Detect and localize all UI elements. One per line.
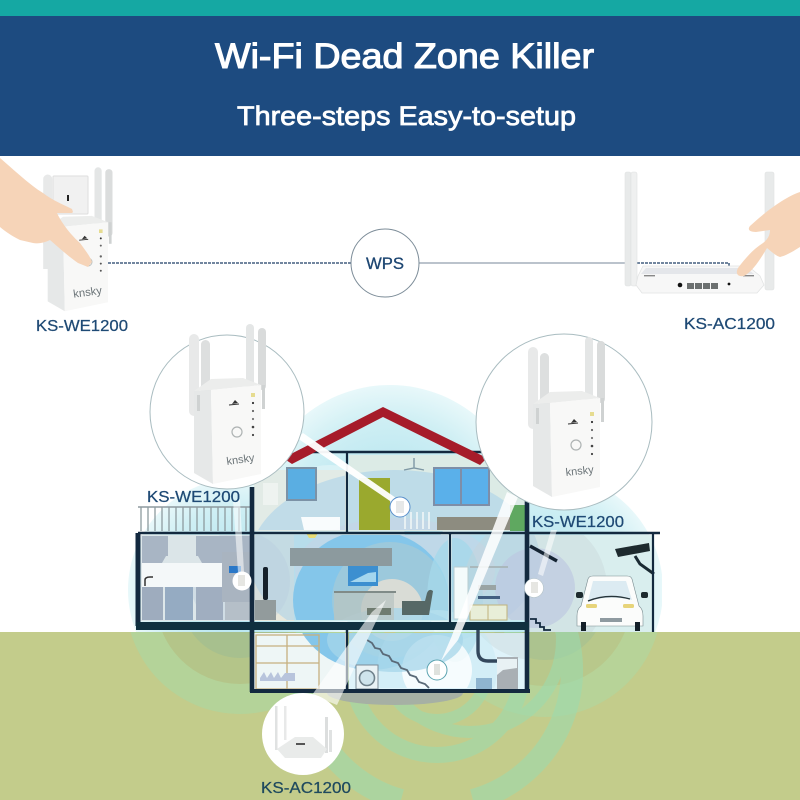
- carport: camera and car: [530, 543, 654, 631]
- beam: right extender callout: [441, 492, 518, 661]
- mini device marker: carport wall: [524, 578, 544, 598]
- callout circle: right extender: [476, 334, 652, 510]
- label: KS-AC1200 bottom: KS-AC1200: [261, 780, 351, 797]
- device: router: [275, 706, 332, 758]
- device: extender: knsky: [565, 464, 595, 479]
- label: KS-AC1200 top right: KS-AC1200: [684, 316, 775, 333]
- wps badge: [351, 229, 419, 297]
- beam: right lower extender pointer: [538, 530, 557, 576]
- wps connection lines: [88, 263, 729, 284]
- beam: left lower extender pointer: [233, 500, 244, 572]
- label: KS-WE1200 right house: KS-WE1200: [532, 514, 624, 531]
- title: Wi-Fi Dead Zone Killer: [215, 37, 594, 76]
- living room: [255, 548, 433, 620]
- device: main router: [625, 172, 774, 293]
- label: KS-WE1200 left house: KS-WE1200: [147, 489, 240, 506]
- wifi coverage glow: [128, 385, 662, 632]
- balcony railing: [138, 507, 250, 531]
- house walls and roof: [136, 407, 660, 692]
- upstairs furniture: [263, 458, 525, 538]
- device: wall-plugged extender: knsky: [73, 285, 103, 301]
- device: extender: [189, 324, 266, 484]
- beam: left extender callout: [297, 433, 396, 503]
- callout circle: left extender: [150, 324, 304, 489]
- header banner: [0, 0, 800, 156]
- device: wall-plugged extender: [43, 167, 113, 311]
- kitchen: [142, 536, 250, 620]
- basement furnishings: [256, 629, 518, 689]
- car: [576, 576, 648, 631]
- wps badge: WPS: [366, 255, 404, 273]
- device: extender: [528, 337, 605, 497]
- house interior rooms: [141, 455, 653, 689]
- label: KS-WE1200 top left: KS-WE1200: [36, 318, 128, 335]
- ground with signal rings: [0, 632, 800, 800]
- mini device marker: kitchen: [232, 572, 252, 590]
- callout circle: bottom router: [262, 693, 344, 775]
- mini device marker: upstairs: [390, 497, 410, 517]
- device: extender: knsky: [226, 452, 256, 468]
- icon: left hand pressing button: [0, 158, 92, 267]
- mini device marker: basement: [427, 660, 447, 680]
- washing machine: [356, 665, 378, 689]
- icon: right hand pressing button: [737, 192, 800, 276]
- subtitle: Three-steps Easy-to-setup: [237, 101, 576, 131]
- wifi signal rings in rooms: [193, 470, 606, 688]
- side room with fridge and shelf: [454, 566, 508, 620]
- beam: router callout: [312, 600, 386, 705]
